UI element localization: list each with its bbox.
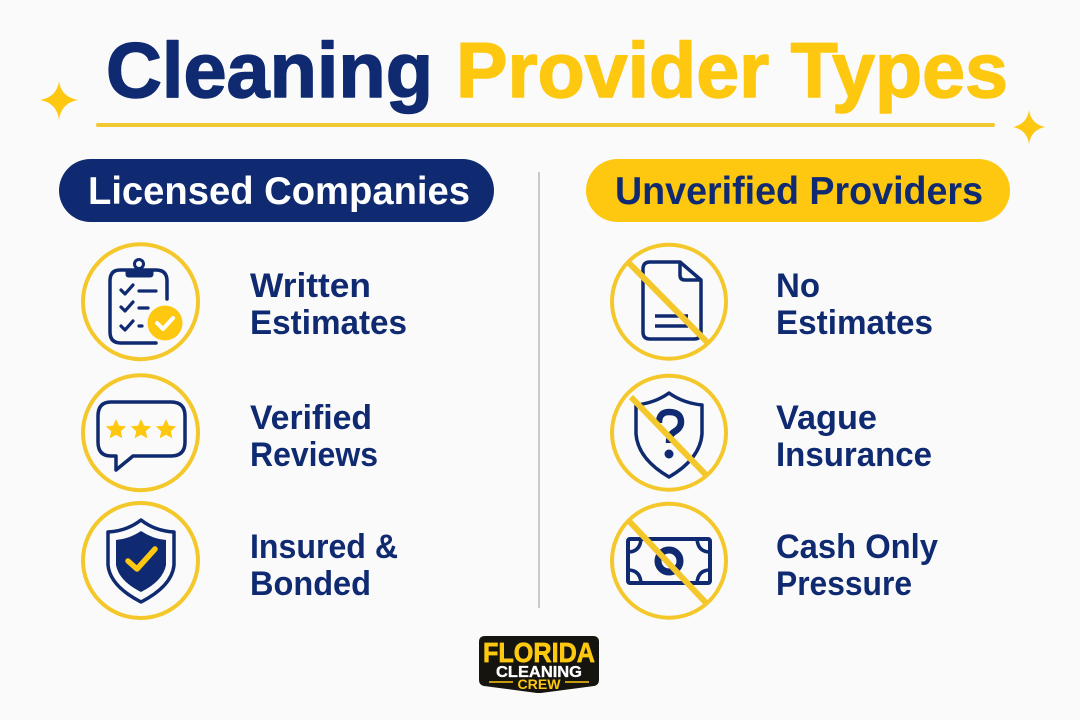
icon: crossed-out shield with question mark (612, 376, 726, 490)
title: Provider Types (456, 26, 1008, 114)
icon: right sparkle (1013, 110, 1045, 144)
label: vague insurance: Vague (776, 399, 877, 437)
label: vague insurance: Insurance (776, 436, 932, 474)
title underline (96, 123, 995, 127)
heading: unverified providers (586, 159, 1010, 222)
logo: florida cleaning crew (479, 636, 599, 693)
label: no estimates (776, 267, 933, 342)
heading: licensed companies: Licensed Companies (88, 170, 470, 213)
label: cash only pressure: Pressure (776, 565, 912, 603)
label: cash only pressure (776, 528, 938, 603)
icon: crossed-out document (612, 245, 726, 359)
label: written estimates (250, 267, 407, 342)
label: written estimates: Estimates (250, 304, 407, 342)
label: insured and bonded (250, 528, 398, 603)
label: insured and bonded: Bonded (250, 565, 371, 603)
icon: speech bubble with stars (83, 375, 198, 490)
title: Cleaning (106, 26, 433, 114)
label: cash only pressure: Cash Only (776, 528, 938, 566)
title (106, 26, 1008, 114)
icon: shield with check (83, 503, 198, 618)
label: vague insurance (776, 399, 932, 474)
center divider (538, 172, 540, 608)
label: insured and bonded: Insured & (250, 528, 398, 566)
icon: crossed-out cash bill (612, 504, 726, 618)
panel: licensed companies (59, 159, 494, 618)
panel: unverified providers (586, 159, 1010, 618)
logo: florida cleaning crew: CREW (518, 676, 561, 692)
label: no estimates: Estimates (776, 304, 933, 342)
heading: licensed companies (59, 159, 494, 222)
label: no estimates: No (776, 267, 820, 305)
heading: unverified providers: Unverified Providers (615, 170, 983, 213)
label: verified reviews: Reviews (250, 436, 378, 474)
label: verified reviews: Verified (250, 399, 372, 437)
label: written estimates: Written (250, 267, 371, 305)
icon: clipboard checklist (83, 244, 198, 359)
logo: florida cleaning crew: FLORIDA (483, 637, 595, 668)
icon: left sparkle (40, 81, 78, 120)
logo: florida cleaning crew: CLEANING (496, 664, 582, 681)
label: verified reviews (250, 399, 378, 474)
